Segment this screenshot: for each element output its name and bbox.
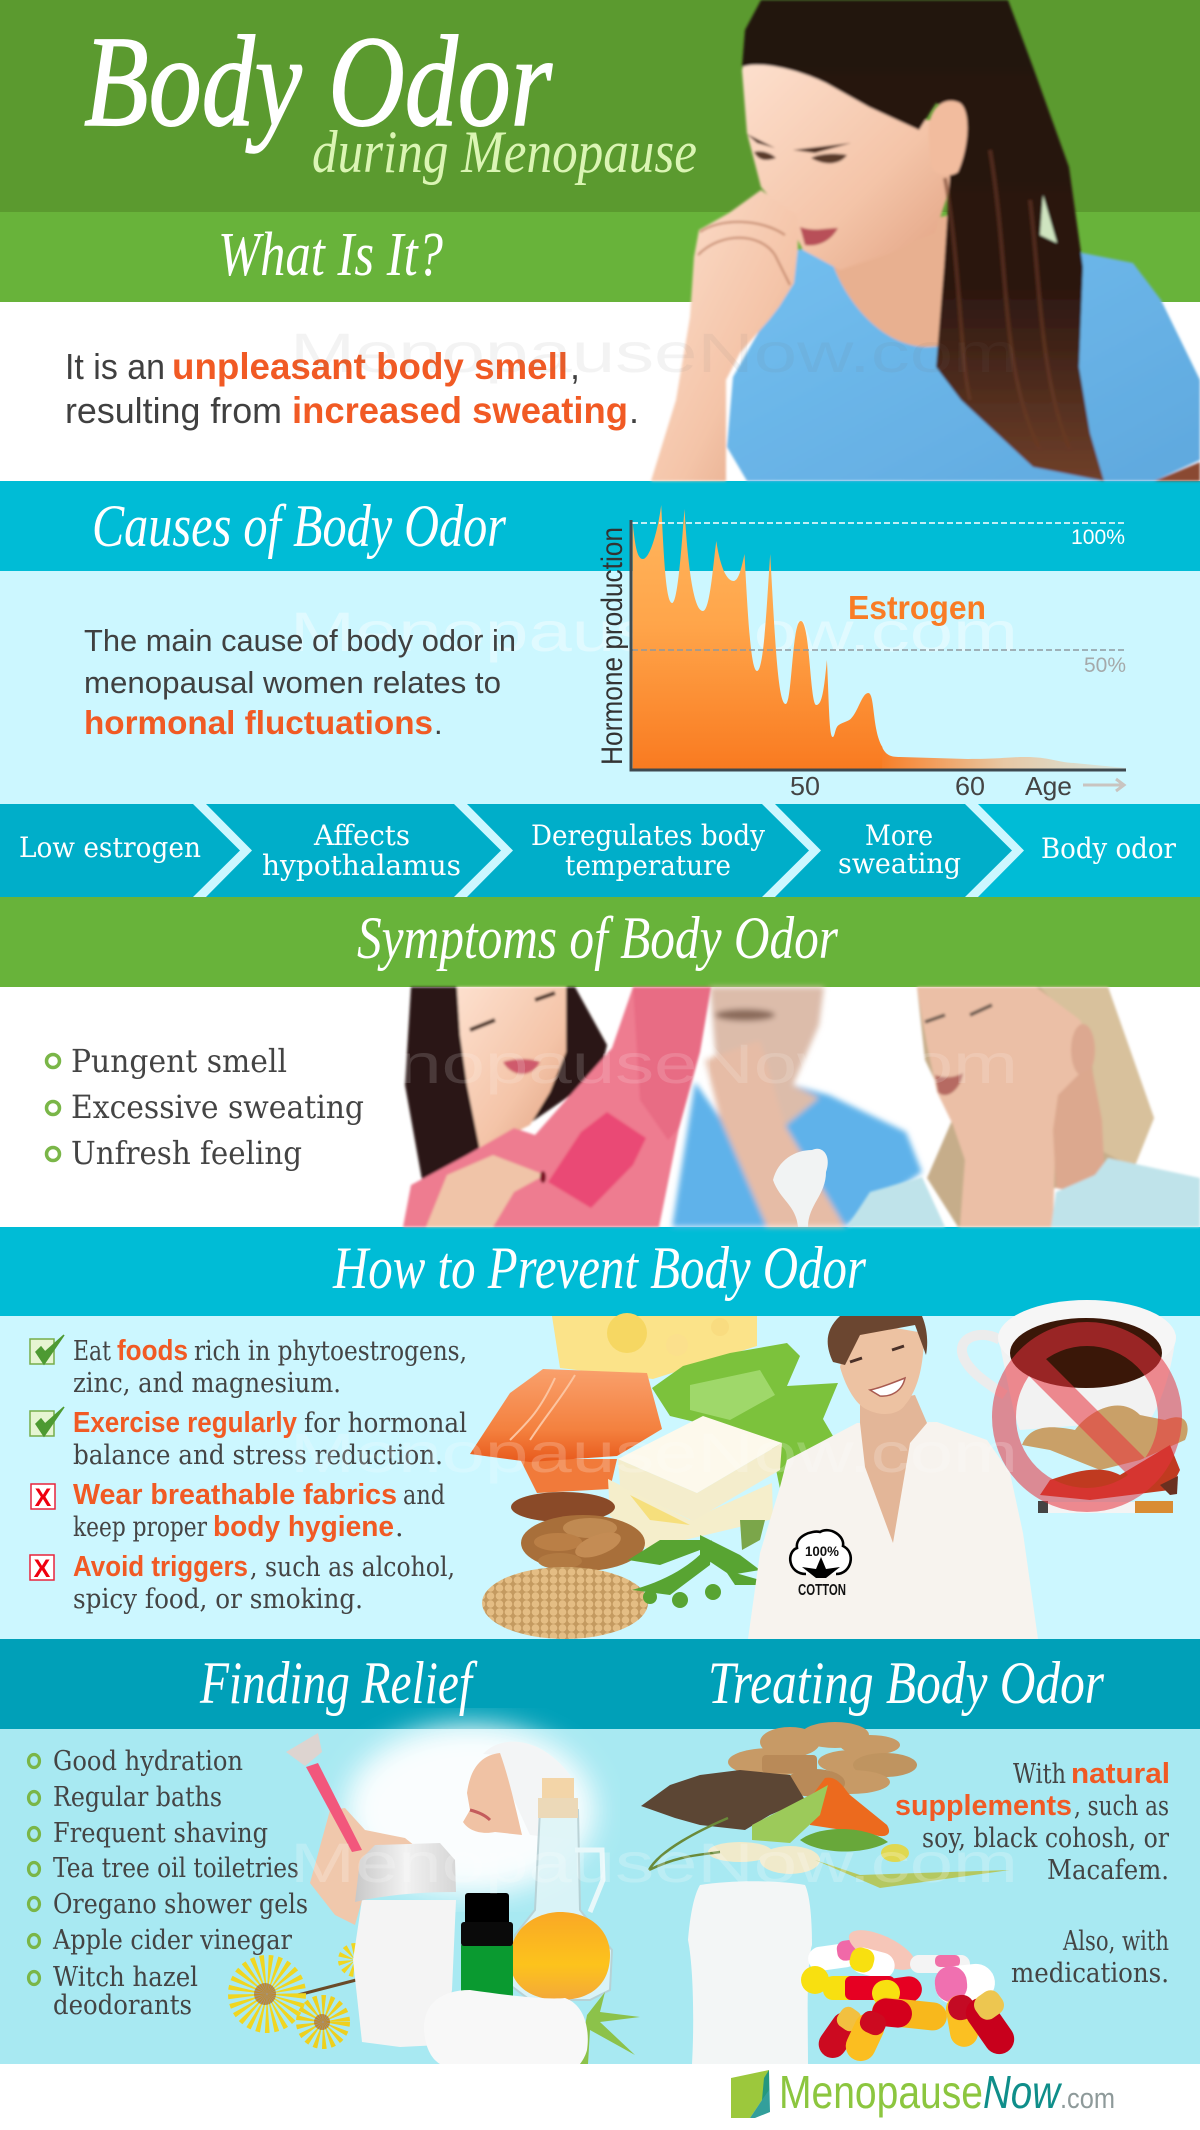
pill pile bbox=[801, 1922, 1020, 2066]
tablets bbox=[728, 1722, 917, 1797]
icon: check bbox=[30, 1335, 64, 1364]
step: more sweating: sweating bbox=[838, 847, 961, 880]
tip: fabrics: Wear breathable fabrics bbox=[73, 1479, 397, 1511]
step: affects hypothalamus bbox=[262, 819, 461, 882]
subtitle: during Menopause bbox=[312, 119, 697, 185]
panel: symptoms band bbox=[0, 897, 1200, 987]
icon: deodorant spray bbox=[773, 1149, 828, 1227]
almonds bbox=[521, 1515, 645, 1571]
witch hazel flowers bbox=[247, 1951, 364, 2036]
step: affects hypothalamus: Affects bbox=[313, 819, 410, 852]
tip: foods: foods bbox=[117, 1335, 188, 1367]
watermark: MenopauseNow.com bbox=[290, 600, 1018, 663]
coffee cup bbox=[962, 1300, 1176, 1430]
bath foam cloud bbox=[345, 1725, 595, 1895]
tick label: 50: 50 bbox=[790, 771, 820, 801]
list: relief tips: Good hydration bbox=[53, 1746, 243, 1777]
text block: definition: resulting from bbox=[65, 390, 282, 431]
woman in bath bbox=[463, 1742, 575, 1840]
chart: tail area bbox=[882, 747, 1126, 770]
leafy greens bbox=[652, 1343, 838, 1489]
tip: foods: rich in phytoestrogens, bbox=[194, 1336, 467, 1367]
photo: smiling woman in cotton shirt bbox=[748, 1316, 1038, 1639]
list: symptoms: Unfresh feeling bbox=[71, 1134, 302, 1172]
tip: triggers bbox=[73, 1551, 455, 1615]
list: relief tips: Regular baths bbox=[53, 1782, 222, 1813]
text block: definition: increased sweating bbox=[292, 390, 628, 431]
text block: natural supplements: With bbox=[1013, 1759, 1066, 1790]
list: symptoms: Excessive sweating bbox=[71, 1088, 364, 1126]
illustration: medications bbox=[688, 1881, 1020, 2066]
photo: woman pinching her nose bbox=[651, 0, 1200, 481]
photo: older woman touching her neck bbox=[847, 987, 1200, 1227]
watermark: MenopauseNow.com bbox=[290, 321, 1018, 384]
axis label: hormone production: Hormone production bbox=[596, 527, 629, 765]
list: relief tips: Witch hazel bbox=[53, 1962, 198, 1993]
icon: check bbox=[30, 1407, 64, 1436]
text block: main cause: The main cause of body odor in bbox=[84, 623, 516, 658]
logo wordmark: Menopause bbox=[779, 2066, 983, 2118]
title: Body Odor bbox=[84, 10, 552, 154]
flax seeds bbox=[511, 1492, 615, 1522]
hand with razor bbox=[286, 1733, 420, 1925]
panel: prevent body bbox=[0, 1316, 1200, 1639]
text block: natural supplements: soy, black cohosh, or bbox=[922, 1823, 1169, 1854]
watermark: MenopauseNow.com bbox=[290, 1831, 1018, 1894]
heading: causes: Causes of Body Odor bbox=[92, 493, 507, 559]
logo: MenopauseNow.com bbox=[731, 2066, 1115, 2118]
tip: triggers: Avoid triggers bbox=[73, 1551, 248, 1583]
icon: cross: X bbox=[34, 1555, 51, 1583]
text block: definition: It is an bbox=[65, 346, 165, 387]
green leaves bbox=[578, 1992, 640, 2064]
tip: exercise: for hormonal bbox=[304, 1408, 467, 1439]
text block: main cause: hormonal fluctuations bbox=[84, 704, 433, 741]
icon: cross: X bbox=[35, 1484, 52, 1512]
tick label: 60: 60 bbox=[955, 771, 985, 801]
label: estrogen: Estrogen bbox=[848, 589, 986, 626]
list: relief tips: deodorants bbox=[53, 1990, 192, 2021]
panel: title background bbox=[0, 0, 1200, 212]
heading: prevent: How to Prevent Body Odor bbox=[332, 1235, 867, 1301]
step: deregulates body temperature: Deregulates body bbox=[531, 819, 765, 852]
logo wordmark: Now bbox=[983, 2066, 1062, 2118]
heading: what is it: What Is It? bbox=[218, 221, 443, 289]
photo: man covering his nose bbox=[672, 987, 922, 1227]
text block: main cause: menopausal women relates to bbox=[84, 665, 501, 700]
badge word: COTTON bbox=[798, 1582, 846, 1599]
deodorant stick bbox=[353, 1843, 456, 2047]
text block: main cause bbox=[84, 623, 516, 741]
tip: exercise bbox=[73, 1407, 467, 1471]
step: low estrogen: Low estrogen bbox=[19, 831, 201, 864]
panel: causes body bbox=[0, 571, 1200, 804]
tip: triggers: spicy food, or smoking. bbox=[73, 1584, 363, 1615]
tip: exercise: balance and stress reduction. bbox=[73, 1440, 443, 1471]
watermark: MenopauseNow.com bbox=[290, 1421, 1018, 1484]
soap bar bbox=[424, 1990, 588, 2064]
process flow: chevrons bbox=[0, 804, 1200, 897]
list: relief tips: Frequent shaving bbox=[53, 1818, 268, 1849]
heading: treating body odor: Treating Body Odor bbox=[708, 1650, 1105, 1716]
soy pod bbox=[752, 1785, 828, 1843]
salmon bbox=[470, 1369, 662, 1493]
illustration: avoid coffee, spice and cigarette bbox=[962, 1300, 1188, 1513]
icon: cross bbox=[30, 1555, 54, 1583]
icon: cross bbox=[31, 1484, 55, 1512]
soybeans bbox=[482, 1567, 648, 1639]
arrow: age direction bbox=[1083, 779, 1124, 791]
green bottle bbox=[461, 1893, 513, 2003]
tip: exercise: Exercise regularly bbox=[73, 1407, 297, 1439]
panel: relief body bbox=[0, 1729, 1200, 2064]
text block: natural supplements: Macafem. bbox=[1047, 1855, 1169, 1886]
photo: woman checking underarm stain bbox=[403, 987, 711, 1227]
step: deregulates body temperature: temperature bbox=[565, 849, 731, 882]
axis label: age: Age bbox=[1025, 771, 1072, 801]
list: relief tips: Apple cider vinegar bbox=[52, 1925, 292, 1956]
text block: definition bbox=[65, 346, 639, 431]
text block: definition: . bbox=[629, 390, 639, 431]
tip: fabrics: body hygiene bbox=[213, 1511, 394, 1543]
cheese bbox=[552, 1313, 757, 1379]
deodorant bbox=[688, 1881, 812, 2064]
list: prevention tips bbox=[30, 1335, 467, 1615]
list: symptoms bbox=[46, 1042, 364, 1172]
chart: estrogen decline bbox=[596, 505, 1126, 801]
chart: estrogen area bbox=[633, 505, 882, 770]
tip: foods: Eat bbox=[73, 1336, 111, 1367]
flower sprig bbox=[649, 1818, 1010, 1888]
illustration: relief products bbox=[247, 1725, 640, 2064]
logo icon bbox=[731, 2070, 770, 2118]
list: symptoms: Pungent smell bbox=[71, 1042, 287, 1080]
panel: causes band bbox=[0, 481, 1200, 571]
label: 50%: 50% bbox=[1084, 654, 1126, 677]
cigarette bbox=[1038, 1501, 1173, 1513]
step: body odor: Body odor bbox=[1041, 832, 1177, 865]
panel: prevent band bbox=[0, 1227, 1200, 1316]
black cohosh root bbox=[641, 1770, 805, 1830]
text block: natural supplements bbox=[895, 1758, 1170, 1886]
panel: what is it band bbox=[0, 212, 1200, 302]
icon: 100% cotton badge bbox=[790, 1530, 851, 1599]
step: more sweating: More bbox=[865, 819, 933, 852]
text block: definition: , bbox=[570, 346, 580, 387]
list: relief tips: Oregano shower gels bbox=[53, 1889, 308, 1920]
panel: what is it body bbox=[0, 302, 1200, 481]
tip: fabrics: and bbox=[403, 1480, 445, 1511]
heading: finding relief: Finding Relief bbox=[199, 1650, 478, 1716]
watermark: MenopauseNow.com bbox=[290, 1032, 1018, 1095]
text block: medications: Also, with bbox=[1062, 1926, 1169, 1957]
badge text: 100% bbox=[805, 1543, 840, 1559]
text block: definition: unpleasant body smell bbox=[172, 346, 568, 387]
heading: symptoms: Symptoms of Body Odor bbox=[357, 905, 839, 971]
panel: relief band bbox=[0, 1639, 1200, 1729]
list: relief tips bbox=[28, 1746, 308, 2021]
text block: main cause: . bbox=[434, 706, 443, 741]
oil jar bbox=[510, 1778, 612, 2000]
fish oil capsule bbox=[805, 1778, 889, 1836]
icon: prohibition sign bbox=[1004, 1334, 1170, 1500]
step: more sweating bbox=[838, 819, 961, 880]
list: relief tips: Tea tree oil toiletries bbox=[53, 1853, 299, 1884]
step: deregulates body temperature bbox=[531, 819, 765, 882]
text block: medications: medications. bbox=[1011, 1958, 1169, 1989]
text block: natural supplements: supplements bbox=[895, 1790, 1072, 1822]
tip: fabrics bbox=[73, 1479, 445, 1543]
tip: triggers: , such as alcohol, bbox=[250, 1552, 455, 1583]
logo wordmark: .com bbox=[1060, 2083, 1115, 2115]
text block: natural supplements: , such as bbox=[1074, 1791, 1169, 1822]
tofu bbox=[608, 1416, 782, 1549]
illustration: healthy foods bbox=[470, 1313, 838, 1639]
illustration: natural supplements bbox=[641, 1722, 1010, 1888]
ginger and chili bbox=[1022, 1406, 1188, 1500]
panel: symptoms body bbox=[0, 987, 1200, 1227]
tip: fabrics: . bbox=[395, 1512, 404, 1543]
step: affects hypothalamus: hypothalamus bbox=[262, 849, 461, 882]
tip: foods: zinc, and magnesium. bbox=[73, 1368, 341, 1399]
tip: foods bbox=[73, 1335, 467, 1399]
text block: medications bbox=[1011, 1926, 1169, 1989]
label: 100%: 100% bbox=[1071, 526, 1125, 549]
edamame pods bbox=[628, 1520, 765, 1608]
tip: fabrics: keep proper bbox=[73, 1512, 207, 1543]
text block: natural supplements: natural bbox=[1071, 1758, 1170, 1790]
